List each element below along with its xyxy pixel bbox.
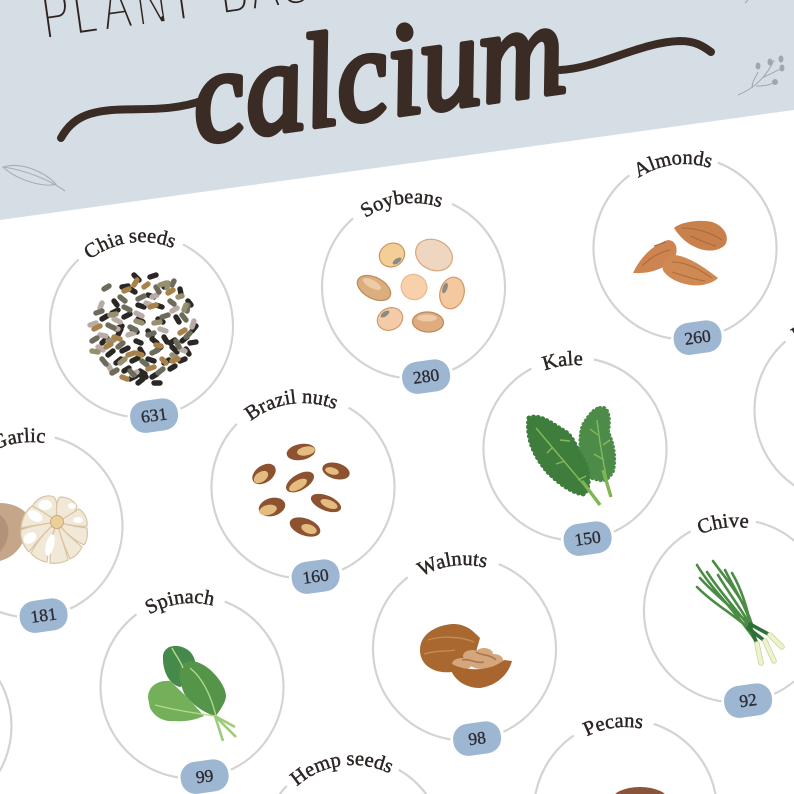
ring and labels: chia seeds: 631 (140, 403, 168, 427)
illustration: spinach (148, 646, 236, 741)
panel: chive (642, 514, 794, 718)
ring and labels: brazil nuts: Brazil nuts (243, 389, 338, 421)
ring and labels: brazil nuts: 160 (301, 564, 330, 588)
illustration: walnuts (420, 624, 512, 688)
left swash (61, 100, 204, 138)
ring and labels: soybeans: 280 (412, 364, 441, 388)
ring and labels: walnuts: 98 (467, 727, 487, 749)
panel: partial right circle (753, 327, 794, 486)
panel: brazil nuts (210, 389, 396, 594)
illustration: garlic (0, 496, 87, 563)
ring and labels: pecans: Pecans (582, 717, 642, 736)
ring and labels: garlic: 181 (29, 603, 58, 627)
ring and labels: chia seeds: Chia seeds (84, 230, 176, 258)
ring and labels: chive (642, 514, 794, 718)
ring and labels: pecans (534, 717, 716, 794)
panel: soybeans (320, 190, 506, 394)
title word: calcium (61, 0, 711, 172)
panel: garlic (0, 428, 124, 633)
panel: partial left circle (0, 634, 12, 794)
illustration: brazil nuts (248, 442, 352, 540)
ring and labels: soybeans (320, 190, 506, 394)
ring and labels: soybeans: Soybeans (360, 190, 442, 217)
ring and labels: kale (482, 350, 668, 556)
icon: branch fragment (745, 0, 748, 3)
ring and labels: garlic (0, 428, 124, 633)
header band (0, 0, 794, 220)
ring and labels: kale: 150 (573, 526, 602, 550)
illustration: kale (528, 408, 614, 505)
ring and labels: chia seeds (48, 230, 234, 433)
panel: pecans (534, 717, 716, 794)
panel: walnuts (372, 552, 557, 756)
illustration: almonds (633, 221, 727, 285)
illustration: chive (697, 561, 782, 663)
illustration: pecans (612, 787, 668, 794)
panel: kale (482, 350, 668, 556)
ring and labels: chive: Chive (698, 514, 748, 533)
ring and labels: almonds (592, 150, 778, 355)
ring and labels: walnuts: Walnuts (416, 552, 487, 575)
ring and labels: spinach (99, 590, 284, 794)
ring and labels: spinach: Spinach (145, 590, 214, 614)
panel: almonds (592, 150, 778, 355)
ring and labels: spinach: 99 (194, 765, 215, 787)
ring and labels: brazil nuts (210, 389, 396, 594)
illustration: soybeans (353, 233, 468, 334)
illustration: chia seeds (90, 275, 196, 383)
ring and labels: almonds: 260 (683, 325, 712, 349)
ring and labels: almonds: Almonds (637, 150, 712, 178)
panel: hemp seeds (278, 755, 428, 794)
panel: chia seeds (48, 230, 234, 433)
ring and labels: hemp seeds: Hemp seeds (288, 755, 392, 786)
ring and labels: chive: 92 (738, 689, 758, 711)
right swash (560, 41, 711, 70)
ring and labels: hemp seeds (278, 755, 428, 794)
panel: spinach (99, 590, 284, 794)
ring and labels: kale: Kale (541, 350, 582, 370)
icon: berry branch (738, 56, 784, 95)
icon: feather (3, 166, 65, 191)
ring and labels: walnuts (372, 552, 557, 756)
